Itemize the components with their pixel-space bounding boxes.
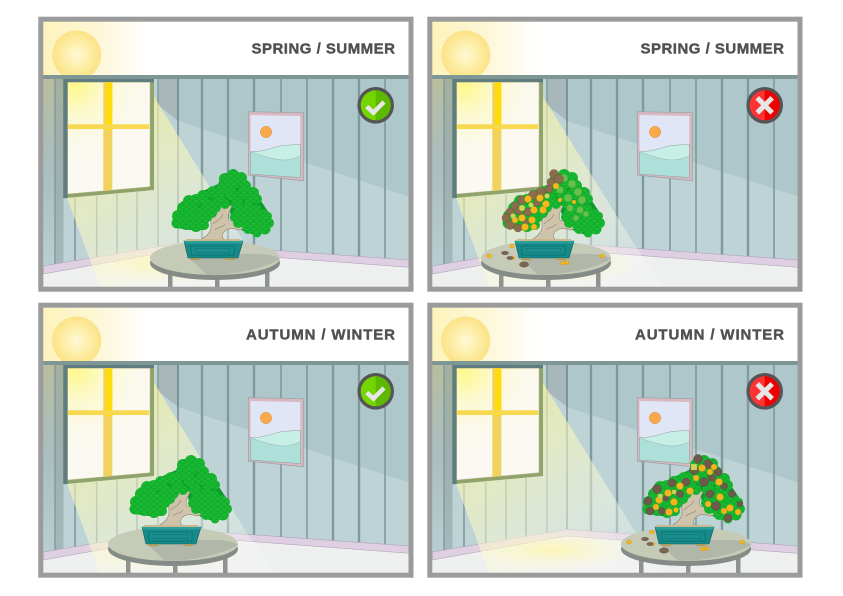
heading: AUTUMN / WINTER: [246, 326, 395, 344]
room scene with sun, window and picture: [432, 22, 798, 298]
room scene with sun, window and picture: [432, 308, 798, 584]
bonsai: dying brown and yellow tree with fallen leaves: [626, 454, 745, 553]
room scene with sun, window and picture: [43, 22, 409, 298]
bonsai: healthy green tree in pot: [172, 169, 274, 260]
heading: AUTUMN / WINTER: [635, 326, 784, 344]
panel border: [430, 305, 800, 575]
panel border: [41, 305, 411, 575]
heading: SPRING / SUMMER: [640, 40, 784, 58]
panel border: [430, 19, 800, 289]
panel: spring/summer, correct placement: [41, 19, 411, 298]
room scene with sun, window and picture: [43, 308, 409, 584]
panel: spring/summer, wrong placement: [430, 19, 800, 298]
panel: autumn/winter, wrong placement: [430, 305, 800, 584]
icon: red cross badge: [746, 87, 783, 124]
icon: green check badge: [357, 87, 394, 124]
panel border: [41, 19, 411, 289]
bonsai: healthy green tree in pot: [130, 455, 232, 546]
icon: green check badge: [357, 373, 394, 410]
bonsai: scorched yellowing tree with fallen leaves: [486, 169, 605, 267]
heading: SPRING / SUMMER: [252, 40, 395, 58]
icon: red cross badge: [746, 373, 783, 410]
panel: autumn/winter, correct placement: [41, 305, 411, 584]
